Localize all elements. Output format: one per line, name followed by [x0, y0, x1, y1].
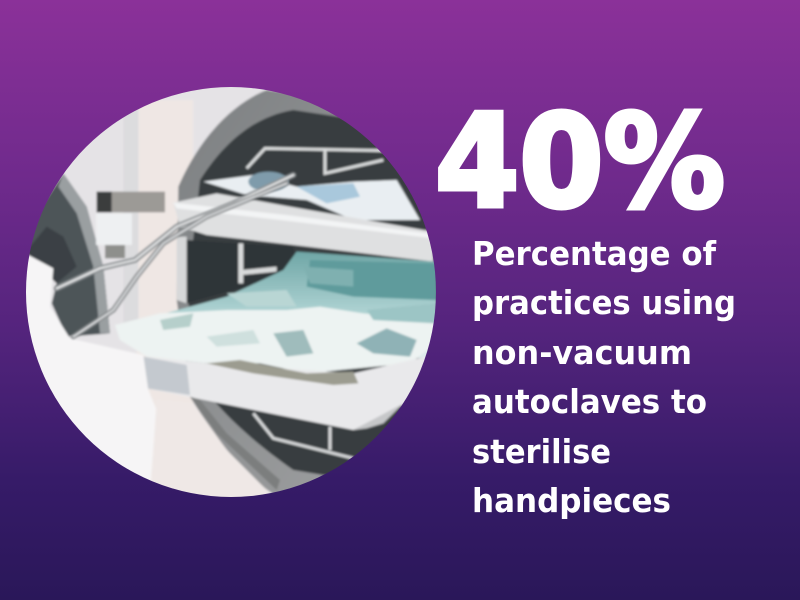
description text: Percentage of [472, 234, 717, 273]
left door seal [30, 174, 108, 338]
lower rack wire [253, 413, 353, 458]
circular photo: autoclave with instrument trays [20, 80, 450, 510]
lower pouch: white paper [115, 307, 437, 373]
description text: handpieces [472, 481, 671, 520]
wall [48, 87, 280, 494]
chamber ring [176, 90, 340, 493]
description text: sterilise [472, 432, 611, 471]
big statistic: 40% [435, 88, 725, 237]
upper rack wire [247, 148, 387, 173]
description text [472, 234, 736, 520]
description text: practices using [472, 283, 736, 322]
white sleeve and hand [26, 254, 156, 480]
upper tray [173, 193, 433, 262]
chamber interior [187, 110, 450, 480]
hinge [97, 192, 165, 212]
lower pouch: teal film [153, 252, 437, 363]
description text: non-vacuum [472, 333, 692, 372]
lower tray [184, 356, 426, 432]
description text: autoclaves to [472, 382, 707, 421]
upper pouches [203, 175, 420, 220]
tongs [57, 175, 293, 337]
